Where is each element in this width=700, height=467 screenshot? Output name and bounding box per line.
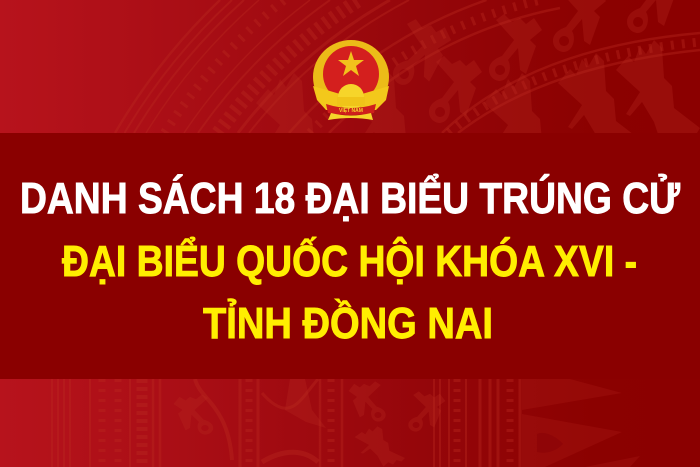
- emblem: gear: [338, 84, 364, 110]
- title band: [0, 133, 700, 379]
- emblem: left rice sheaf: [313, 86, 341, 110]
- emblem: scroll base: [328, 113, 373, 120]
- emblem: red field: [323, 46, 379, 102]
- background pattern: bronze drum top: [114, 0, 700, 133]
- national emblem: [313, 40, 389, 120]
- title line 3: TỈNH ĐỒNG NAI: [203, 298, 493, 348]
- emblem: gear base: [337, 97, 365, 106]
- emblem: gold ring: [313, 40, 389, 114]
- emblem: ribbon label: VIỆT NAM: [339, 106, 363, 114]
- emblem: ribbon: [326, 104, 376, 115]
- background pattern: bronze drum bottom: [52, 379, 640, 467]
- emblem: star: [338, 51, 364, 76]
- emblem: right rice sheaf: [361, 86, 389, 110]
